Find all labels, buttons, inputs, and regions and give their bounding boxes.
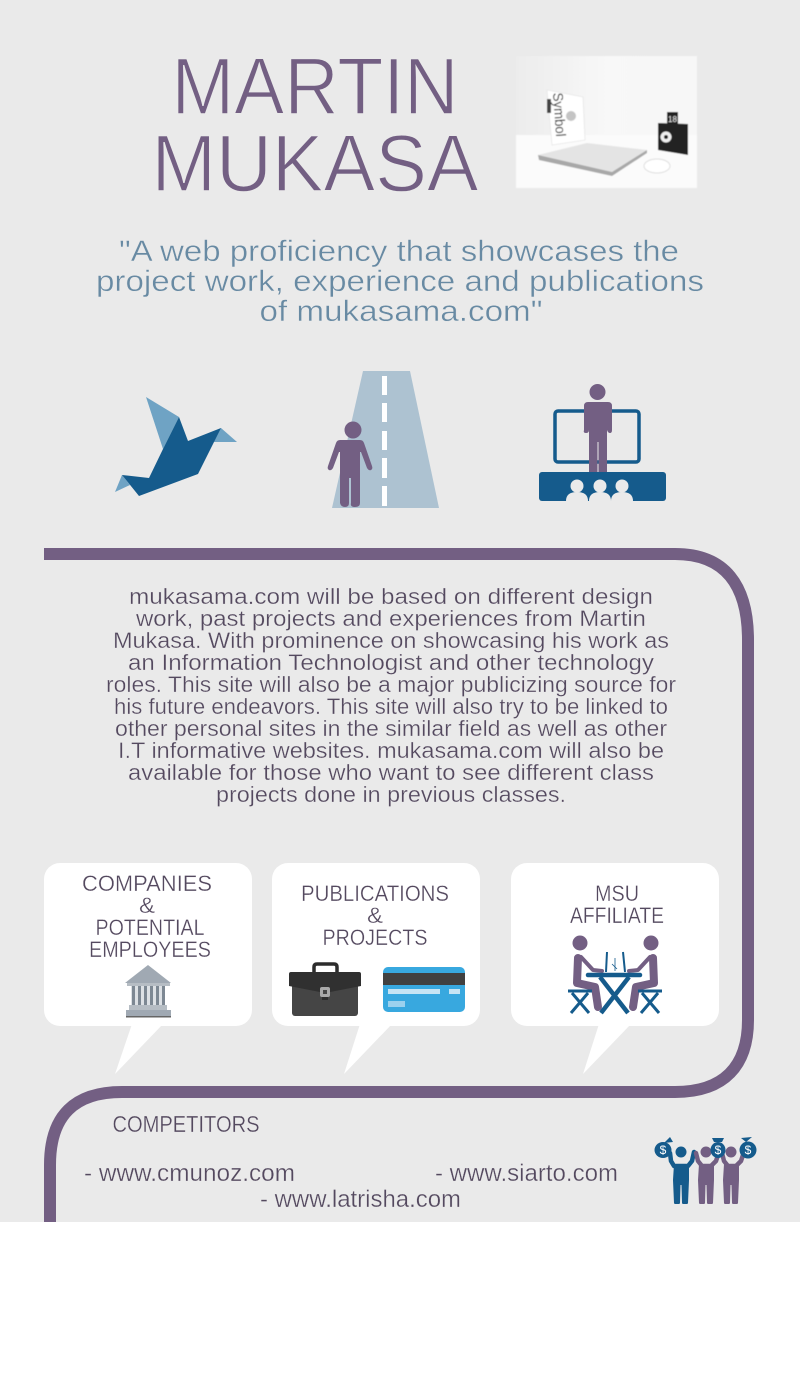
subtitle quote: of mukasama.com": [260, 295, 542, 328]
icon: briefcase: [289, 964, 361, 1016]
competitors heading: COMPETITORS: [112, 1111, 260, 1137]
icon: bank building: [125, 965, 171, 1018]
competitors list: [84, 1160, 618, 1213]
icon: three people with money bags: $: [715, 1143, 722, 1157]
competitors list: - www.latrisha.com: [260, 1186, 461, 1213]
icon: three people with money bags: $: [745, 1143, 752, 1157]
panel: companies and potential employees: COMPANIES: [82, 871, 212, 896]
photo: laptop on desk: [516, 56, 697, 188]
photo: laptop on desk: Symbol: [550, 92, 569, 137]
competitors list: - www.siarto.com: [435, 1160, 618, 1187]
panel: companies and potential employees: EMPLOYEES: [89, 937, 211, 962]
panel: publications and projects: PUBLICATIONS: [301, 881, 449, 906]
title: MARTIN: [172, 42, 458, 132]
title: MUKASA: [152, 119, 478, 209]
icon: three people with money bags: $: [660, 1143, 667, 1157]
description text block: [106, 584, 676, 807]
panel: companies and potential employees: [44, 863, 252, 1074]
path: upper winding line: [44, 554, 748, 1222]
description text block: available for those who want to see different class: [128, 760, 654, 785]
panel: companies and potential employees: &: [139, 893, 155, 918]
subtitle quote: [96, 235, 704, 328]
title: [152, 42, 478, 209]
description text block: mukasama.com will be based on different design: [129, 584, 653, 609]
description text block: projects done in previous classes.: [216, 782, 566, 807]
photo: laptop on desk: 18: [668, 115, 677, 124]
panel: companies and potential employees: POTENTIAL: [96, 915, 204, 940]
subtitle quote: project work, experience and publications: [96, 265, 704, 298]
description text block: his future endeavors. This site will also try to be linked to: [114, 694, 668, 719]
description text block: an Information Technologist and other technology: [128, 650, 654, 675]
description text block: Mukasa. With prominence on showcasing his work as: [113, 628, 669, 653]
competitors list: - www.cmunoz.com: [84, 1160, 295, 1187]
description text block: other personal sites in the similar field as well as other: [115, 716, 667, 741]
panel: publications and projects: PROJECTS: [322, 925, 428, 950]
panel: MSU affiliate: AFFILIATE: [570, 903, 664, 928]
description text block: I.T informative websites. mukasama.com will also be: [118, 738, 664, 763]
panel: MSU affiliate: [511, 863, 719, 1074]
panel: publications and projects: [272, 863, 480, 1074]
panel: publications and projects: &: [367, 903, 383, 928]
icon: credit card: [383, 967, 465, 1012]
subtitle quote: "A web proficiency that showcases the: [119, 235, 679, 268]
icon: presenter with audience: [539, 384, 666, 501]
icon: three people with money bags: [654, 1137, 756, 1204]
description text block: roles. This site will also be a major publicizing source for: [106, 672, 676, 697]
description text block: work, past projects and experiences from Martin: [135, 606, 646, 631]
icon: two people at table: [568, 936, 662, 1013]
panel: MSU affiliate: MSU: [595, 881, 639, 906]
icon: person on road: [328, 371, 439, 508]
icon: origami bird: [115, 397, 237, 496]
